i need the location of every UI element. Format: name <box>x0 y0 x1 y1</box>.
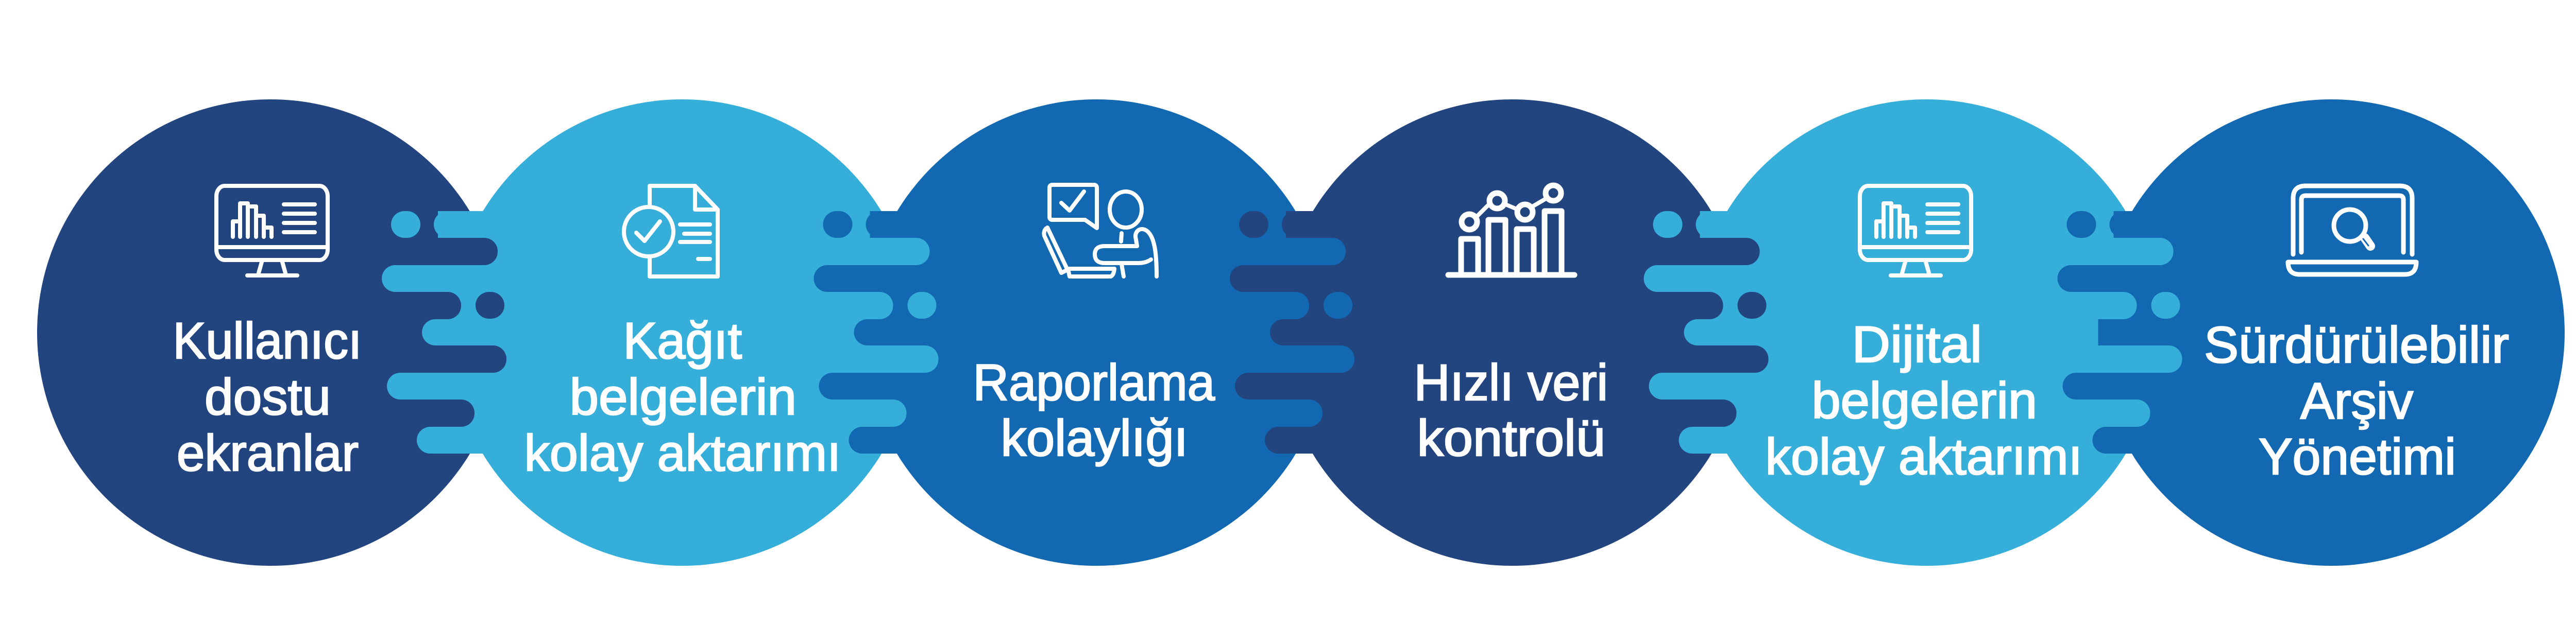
circle panel 4 background <box>1279 99 1745 566</box>
circle panel 5 background <box>1693 99 2160 566</box>
heading: Sürdürülebilir Arşiv Yönetimi: Yönetimi <box>2259 428 2456 485</box>
icon: monitor with chart (panel 5) <box>1860 186 1971 275</box>
circle panel 3 background <box>863 99 1330 566</box>
heading: Dijital belgelerin kolay aktarımı: Dijital <box>1852 316 1982 373</box>
heading: Kağıt belgelerin kolay aktarımı: Kağıt <box>623 312 742 369</box>
circle panel 2 background <box>449 99 916 566</box>
heading: Hızlı veri kontrolü: Hızlı veri <box>1414 354 1608 411</box>
icon: person at laptop with speech bubble (panel 3) <box>1044 185 1157 276</box>
heading: Hızlı veri kontrolü <box>1414 354 1608 466</box>
heading: Kullanıcı dostu ekranlar: dostu <box>205 368 331 425</box>
heading: Kağıt belgelerin kolay aktarımı: belgelerin <box>570 368 796 425</box>
icon: monitor with chart (panel 1) <box>216 186 328 275</box>
circle panel 1 background <box>37 99 504 566</box>
heading: Kağıt belgelerin kolay aktarımı: kolay aktarımı <box>524 424 841 481</box>
heading: Raporlama kolaylığı: Raporlama <box>973 354 1215 411</box>
interlocking fingers: panel 5 to 6 <box>2052 211 2191 454</box>
heading: Hızlı veri kontrolü: kontrolü <box>1417 409 1605 466</box>
heading: Sürdürülebilir Arşiv Yönetimi <box>2204 316 2509 485</box>
heading: Dijital belgelerin kolay aktarımı <box>1765 316 2082 485</box>
heading: Sürdürülebilir Arşiv Yönetimi: Sürdürülebilir <box>2204 316 2509 373</box>
heading: Dijital belgelerin kolay aktarımı: kolay aktarımı <box>1765 428 2082 485</box>
circle panel 6 background <box>2098 99 2565 566</box>
icon: laptop with magnifying glass (panel 6) <box>2288 186 2416 274</box>
heading: Kullanıcı dostu ekranlar: Kullanıcı <box>173 312 362 369</box>
icon: document with check badge (panel 2) <box>624 186 718 276</box>
heading: Raporlama kolaylığı <box>973 354 1215 466</box>
heading: Kullanıcı dostu ekranlar: ekranlar <box>177 424 359 481</box>
heading: Raporlama kolaylığı: kolaylığı <box>1001 409 1188 466</box>
interlocking fingers: panel 3 to 4 <box>1224 211 1363 454</box>
interlocking fingers: panel 4 to 5 <box>1638 211 1777 454</box>
interlocking fingers: panel 2 to 3 <box>808 211 947 454</box>
heading: Sürdürülebilir Arşiv Yönetimi: Arşiv <box>2300 372 2413 429</box>
heading: Kullanıcı dostu ekranlar <box>173 312 362 481</box>
interlocking fingers: panel 1 to 2 <box>376 211 515 454</box>
heading: Kağıt belgelerin kolay aktarımı <box>524 312 841 481</box>
icon: bar chart with trend line (panel 4) <box>1448 185 1574 275</box>
heading: Dijital belgelerin kolay aktarımı: belgelerin <box>1811 372 2037 429</box>
